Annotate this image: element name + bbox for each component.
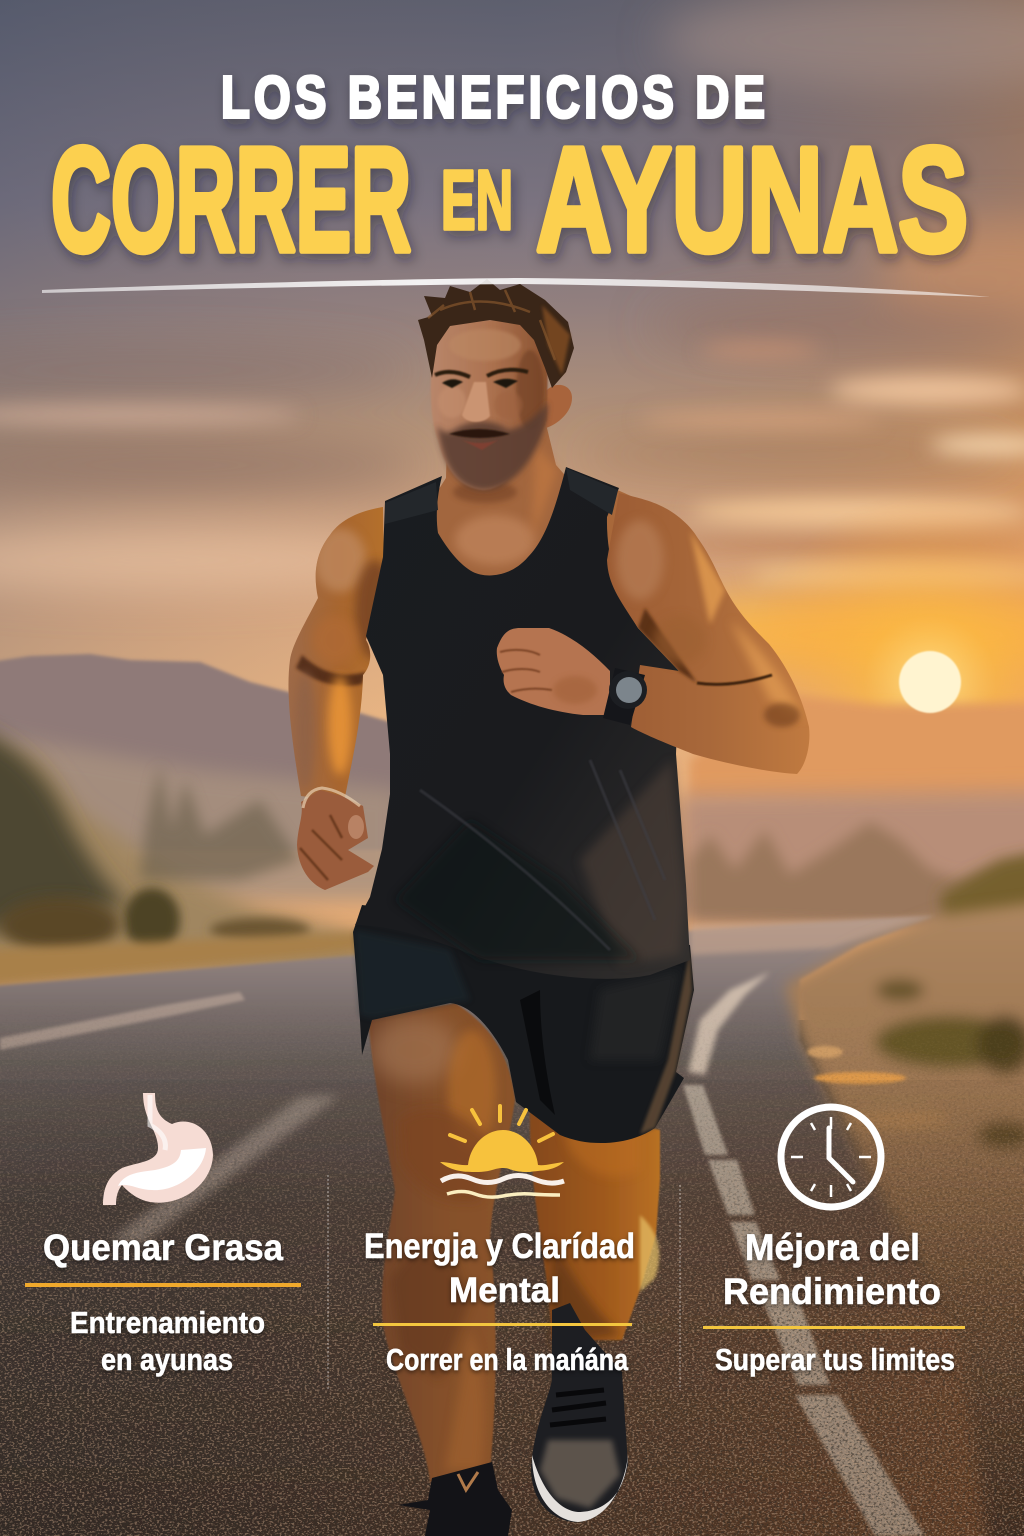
icon: stomach	[103, 1093, 213, 1205]
title line two	[51, 118, 968, 282]
face	[431, 318, 548, 490]
benefit title: Quemar Grasa	[43, 1227, 283, 1268]
benefit caption: Entrenamiento	[70, 1305, 265, 1340]
title line two: CORRER	[51, 118, 411, 282]
distant mountains	[0, 654, 1024, 920]
icon: rising sun over waves	[440, 1106, 564, 1197]
asphalt grain	[0, 1000, 1024, 1536]
runner shirt	[355, 467, 690, 979]
road	[0, 916, 1024, 1536]
ear	[545, 385, 572, 428]
background: sunset sky	[0, 0, 1024, 1020]
beard	[437, 402, 548, 490]
trees and bushes right	[690, 822, 1024, 980]
accent line	[25, 1283, 301, 1287]
sun glow	[740, 492, 1024, 872]
benefit title: Energja y Clarídad	[364, 1227, 635, 1266]
runner left hand	[297, 788, 374, 890]
runner neck	[425, 420, 578, 588]
runner back leg	[530, 1098, 660, 1345]
road patches	[807, 1046, 906, 1084]
runner head	[418, 279, 574, 490]
panel: quemar grasa	[25, 1093, 301, 1377]
runner front shoe	[398, 1462, 512, 1536]
benefit title: Méjora del	[745, 1227, 920, 1268]
face shading	[438, 329, 544, 430]
heading	[42, 66, 990, 297]
benefit caption: Superar tus limites	[715, 1342, 955, 1377]
column dividers	[328, 1175, 680, 1390]
accent line	[373, 1323, 632, 1326]
benefit caption	[70, 1305, 265, 1377]
runner right arm	[607, 493, 809, 774]
road markings	[0, 972, 925, 1536]
benefit title: Rendimiento	[723, 1271, 941, 1312]
runner shoulder under strap	[595, 480, 645, 625]
runner back shoe	[531, 1303, 628, 1522]
benefit caption: en ayunas	[101, 1342, 233, 1377]
benefit title: Mental	[449, 1271, 560, 1310]
bottom dark overlay	[0, 1080, 1024, 1536]
hair	[418, 279, 574, 388]
title swoosh	[42, 278, 990, 297]
panel: mejora del rendimiento	[703, 1107, 965, 1377]
benefit caption: Correr en la mańána	[386, 1342, 629, 1377]
runner shorts	[353, 905, 694, 1143]
icon: sun	[899, 651, 961, 713]
eyes	[435, 370, 528, 388]
panel: energia y claridad	[364, 1106, 635, 1377]
icon: sports watch	[603, 668, 647, 725]
accent line	[703, 1326, 965, 1329]
icon: clock	[781, 1107, 881, 1207]
runner left arm	[288, 507, 384, 798]
runner right hand	[497, 628, 610, 715]
trees and hillside left	[0, 725, 365, 988]
benefit title	[723, 1227, 941, 1312]
roadside verge	[785, 900, 1024, 1536]
title line two: EN	[441, 153, 513, 247]
runner	[288, 279, 809, 1536]
title line one: LOS BENEFICIOS DE	[221, 66, 765, 131]
nose and mouth	[449, 382, 510, 450]
benefit title	[364, 1227, 635, 1310]
runner front leg	[368, 1003, 515, 1482]
